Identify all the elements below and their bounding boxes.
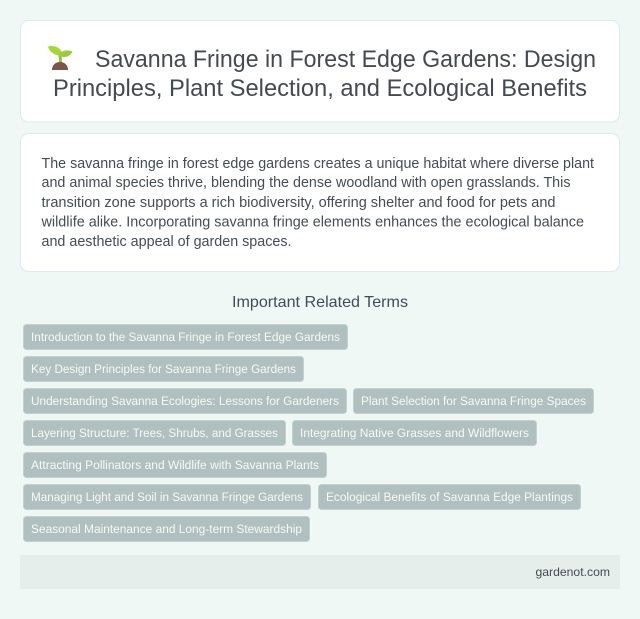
- description text: wildlife alike. Incorporating savanna fringe elements enhances the ecological balance: [40, 214, 584, 230]
- tag: pollinators: Attracting Pollinators and Wildlife with Savanna Plants: [31, 458, 319, 472]
- tag: pollinators: [24, 452, 326, 478]
- description text: [40, 156, 594, 250]
- tag: savanna ecologies: Understanding Savanna Ecologies: Lessons for Gardeners: [31, 394, 339, 408]
- tag: native grasses: [292, 420, 536, 446]
- tag: ecological benefits: Ecological Benefits of Savanna Edge Plantings: [326, 490, 573, 504]
- tag: introduction: [24, 324, 348, 350]
- tag: layering structure: Layering Structure: Trees, Shrubs, and Grasses: [31, 426, 278, 440]
- tag: plant selection: Plant Selection for Savanna Fringe Spaces: [361, 394, 586, 408]
- heading: related terms: Important Related Terms: [232, 294, 408, 311]
- title text: Savanna Fringe in Forest Edge Gardens: Design: [95, 46, 596, 73]
- tag: layering structure: [24, 420, 286, 446]
- title text: Principles, Plant Selection, and Ecological Benefits: [53, 75, 587, 102]
- tag: seasonal maintenance: Seasonal Maintenance and Long-term Stewardship: [31, 522, 302, 536]
- description text: and animal species thrive, blending the dense woodland with open grasslands. This: [42, 175, 570, 191]
- tag: plant selection: [354, 388, 594, 414]
- tag: design principles: [24, 356, 304, 382]
- tag: native grasses: Integrating Native Grasses and Wildflowers: [300, 426, 529, 440]
- description text: The savanna fringe in forest edge gardens creates a unique habitat where diverse plant: [42, 156, 594, 172]
- tag: savanna ecologies: [24, 388, 346, 414]
- tag: design principles: Key Design Principles for Savanna Fringe Gardens: [31, 362, 296, 376]
- panel: related term tags: [24, 324, 594, 542]
- panel: description: [20, 134, 620, 272]
- footer: gardenot.com: [536, 565, 610, 579]
- footer: [20, 555, 620, 589]
- title text: [53, 46, 596, 102]
- panel: title card: [20, 20, 620, 122]
- tag: seasonal maintenance: [24, 516, 310, 542]
- tag: ecological benefits: [318, 484, 580, 510]
- tag: light and soil: Managing Light and Soil in Savanna Fringe Gardens: [31, 490, 303, 504]
- tag: light and soil: [24, 484, 310, 510]
- icon: seedling: [48, 46, 72, 70]
- description text: and aesthetic appeal of garden spaces.: [42, 234, 292, 250]
- description text: transition zone supports a rich biodiversity, offering shelter and food for pets and: [42, 195, 556, 211]
- tag: introduction: Introduction to the Savanna Fringe in Forest Edge Gardens: [31, 330, 340, 344]
